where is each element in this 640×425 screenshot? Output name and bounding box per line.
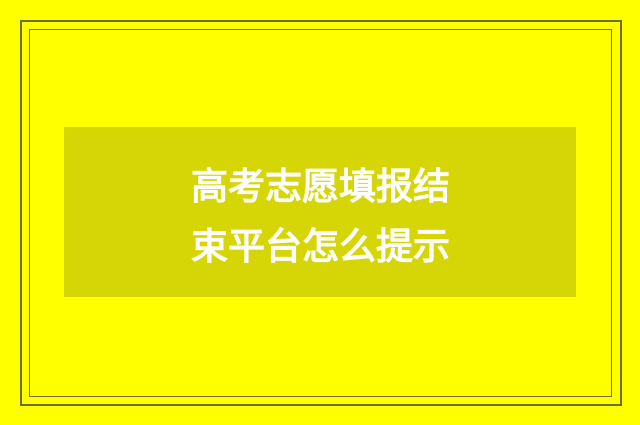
title panel bbox=[64, 127, 576, 297]
inner frame border bbox=[29, 29, 612, 397]
title line 2: 束平台怎么提示 bbox=[191, 226, 450, 267]
title line 1: 高考志愿填报结 bbox=[191, 166, 450, 207]
